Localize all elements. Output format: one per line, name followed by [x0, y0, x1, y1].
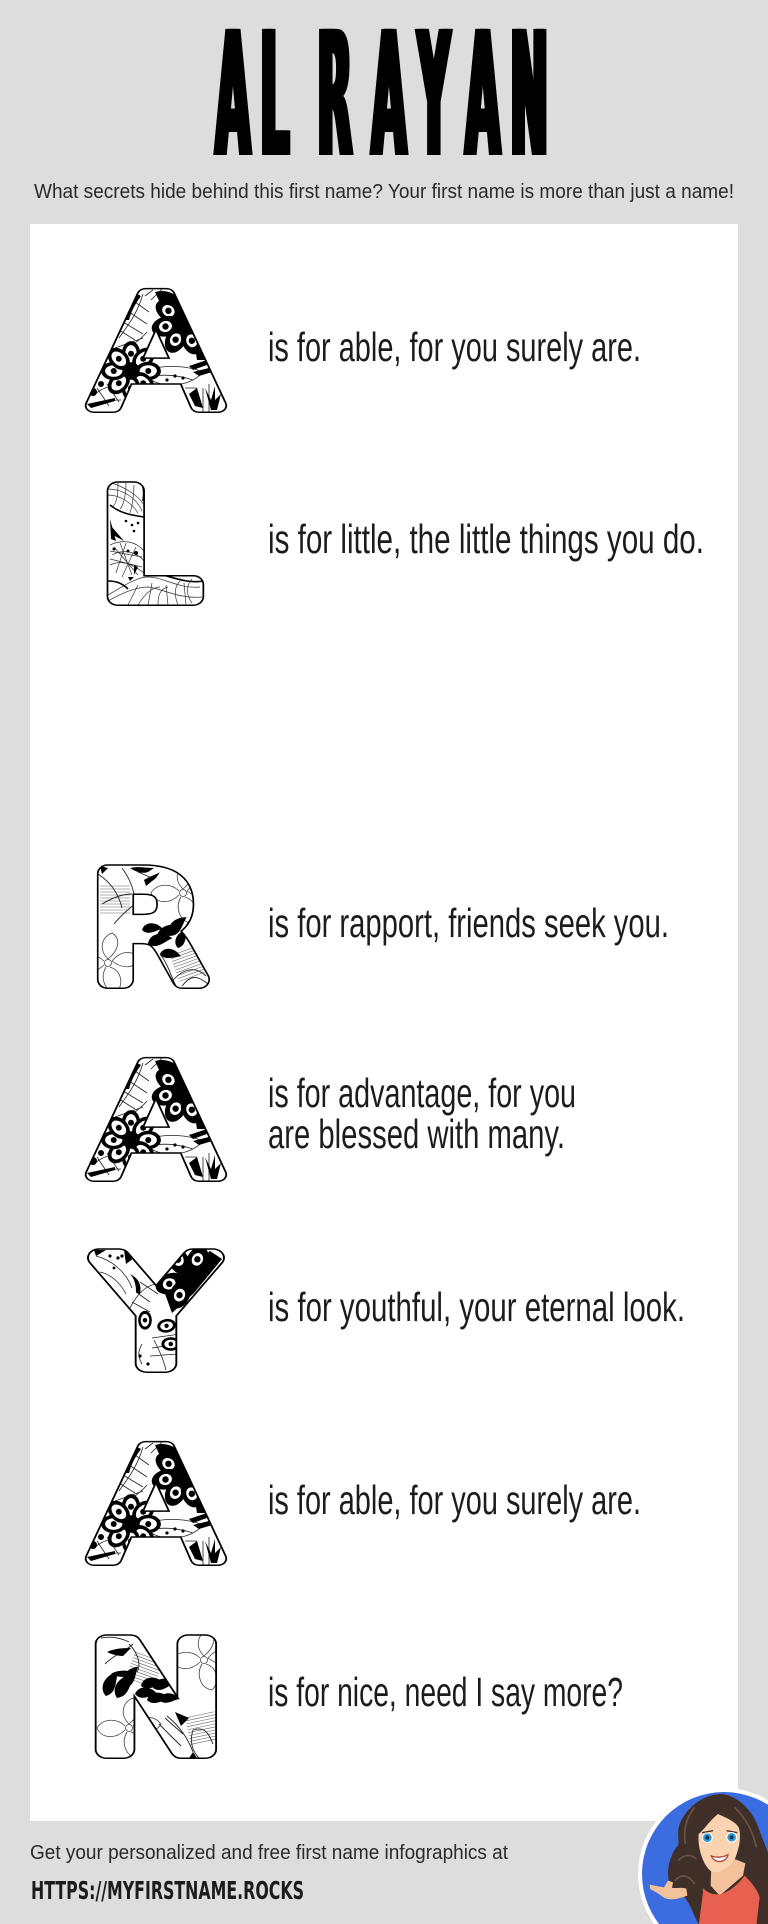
- footer prompt: Get your personalized and free first name infographics at: [30, 1842, 508, 1864]
- icon: avatar woman in circle: [638, 1788, 768, 1924]
- row: L is for little: [101, 462, 704, 632]
- text: advantage: are blessed with many.: [268, 1111, 565, 1157]
- icon: mandala letter Y: Y: [98, 1230, 213, 1398]
- row: R is for rapport: [92, 846, 669, 1014]
- panel: letter meanings: [30, 224, 738, 1821]
- text: nice: is for nice, need I say more?: [268, 1669, 623, 1715]
- icon: mandala letter N: N: [89, 1616, 223, 1784]
- text: advantage: is for advantage, for you: [268, 1070, 576, 1116]
- icon: mandala letter R: R: [92, 846, 204, 1014]
- icon: mandala letter A: A: [92, 266, 220, 442]
- row: Y is for youthful: [98, 1230, 685, 1398]
- footer url: HTTPS://MYFIRSTNAME.ROCKS: [31, 1876, 304, 1905]
- subtitle: What secrets hide behind this first name? Your first name is more than just a name!: [34, 181, 734, 203]
- row: A is for advantage: [92, 1034, 576, 1210]
- row: A is for able: [92, 266, 641, 442]
- text: advantage: [268, 1070, 576, 1157]
- icon: mandala letter A: A: [92, 1034, 220, 1210]
- icon: mandala letter A: A: [92, 1418, 220, 1594]
- title: AL RAYAN: [216, 0, 548, 196]
- row: N is for nice: [89, 1616, 623, 1784]
- panel background: [30, 224, 738, 1821]
- icon: mandala letter L: L: [101, 462, 194, 632]
- row: A is for able: [92, 1418, 641, 1594]
